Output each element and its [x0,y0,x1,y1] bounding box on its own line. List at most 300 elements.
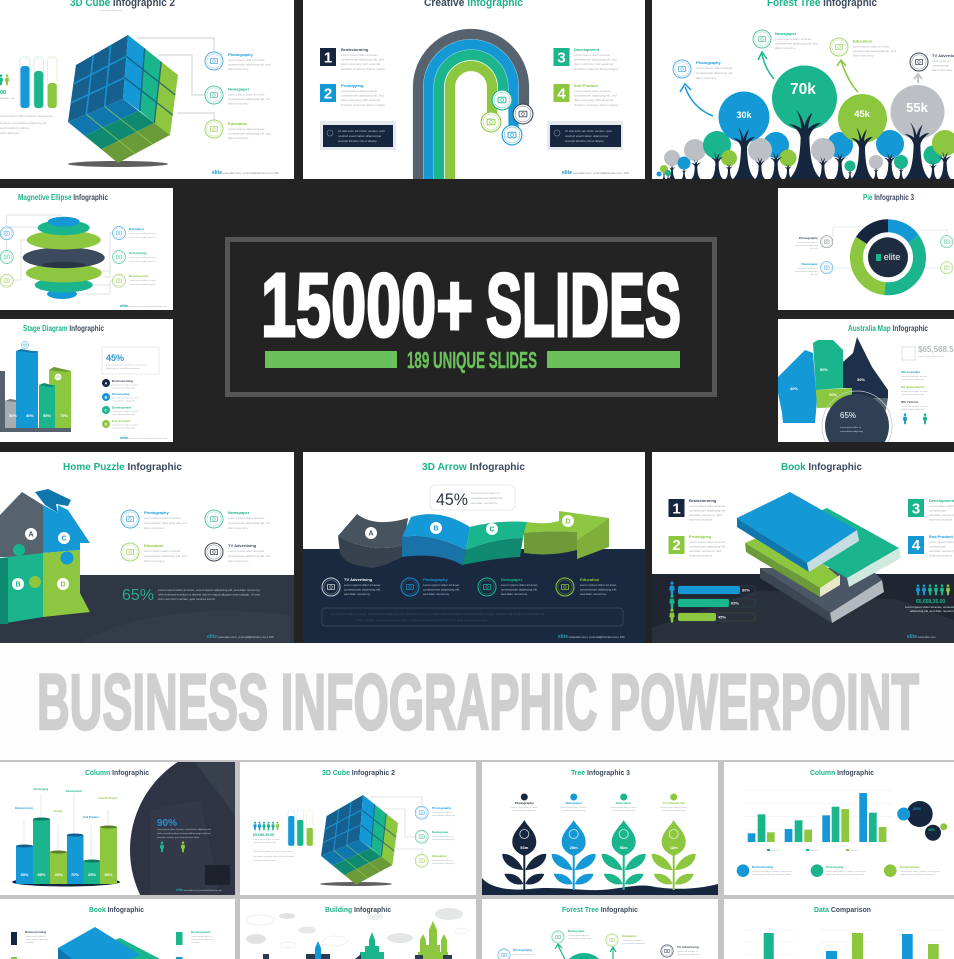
45% box: 45% [106,353,124,363]
region list: WA Australia [901,370,920,374]
circle stats [897,801,947,841]
cylinder chart: 80% [104,872,113,877]
bottom stat items [737,864,940,877]
callout: TV Advertising: diam nonummy [932,68,953,72]
callout: TV Advertising: TV Advertising [228,543,257,548]
map of Australia [778,337,892,442]
footer: elite www.elite.com | yourmail@domain.com | 106 [558,634,625,640]
people stat: Lorem ipsum dolor sit amet, consectetuer [253,850,293,853]
icons and labels [0,227,156,287]
column labels: Prototyping [34,787,49,791]
leaf plants: 18m [670,845,678,850]
heading: Home Puzzle: Home Puzzle Infographic [63,461,182,473]
people stat: sed tincidunt ut labore [0,126,30,130]
panel: bottom Data Comparison [724,899,954,959]
bars chart [288,810,313,846]
callout: Newspaper: Newspaper [228,86,250,92]
3D arrow ribbon: B [433,526,439,532]
callout: Photography [205,52,271,71]
panel: Australia Map slide [778,319,954,442]
45% box: adipiscing elit, sed diam nonummy [106,367,140,370]
callout: Education: Lorem ipsum dolor sit amet, [853,44,890,48]
note box [322,608,623,626]
callout: Newspaper: diam nonummy [228,526,249,530]
callouts [415,806,456,867]
note box left: suscipit lobortis nisl ut aliquip [338,139,377,143]
plant headers: Lorem ipsum dolor sit amet, [660,806,688,809]
callouts: Photography [432,806,451,810]
bottom stat items: Brainstorming [752,865,773,869]
pie labels and icons: Newspaper [801,262,819,266]
people stat: sit amet, consectetur adipiscing elit [0,121,47,125]
step 3: Development [929,498,954,503]
lettered list: consectetuer adipiscing [112,413,136,416]
panel: Forest Tree Infographic slide [652,0,954,179]
pie labels and icons: consectetuer adipiscing [795,270,819,273]
step 4: 4 [557,86,566,102]
stat: 90%: nibh euismod tincidunt ut laoreet dolore magna aliquam [157,832,211,835]
bottom stat items: adipiscing elit, sed diam nonummy nibh [752,873,791,876]
heading: Magnetive Ellipse: Magnetive Ellipse Infographic [18,193,108,202]
step 1: 1 [324,50,332,66]
step boxes: sed diam [191,942,200,944]
lettered list: Prototyping [112,392,129,396]
callouts: Lorem ipsum dolor sit [622,939,643,942]
puzzle house: C [61,536,67,542]
plant headers: Lorem ipsum dolor sit amet, [511,806,538,809]
plant headers: Lorem ipsum dolor sit amet, [560,806,588,809]
headline: 15000+ SLIDES: SLIDES [486,256,681,356]
step 4: 4 [912,537,921,554]
callout: Photography: Lorem ipsum dolor sit amet, [228,58,265,62]
callout: Education: consectetuer adipiscing elit, sed [144,554,187,558]
bottom stat items: Lorem ipsum dolor sit amet, consectetuer [900,870,940,873]
progress bars [669,581,755,622]
step 4 [908,534,954,558]
callouts [498,929,701,959]
step 4 [554,83,618,107]
step 1: consectetuer adipiscing elit, [689,508,726,512]
region list: consectetuer adipiscing [901,378,925,381]
callout: TV Advertising [910,53,954,72]
callout: Education: Lorem ipsum dolor sit amet, [144,549,181,553]
title frame [228,240,714,394]
callout: Photography: Lorem ipsum dolor sit amet, [696,66,733,70]
panel: bottom Forest Tree Infographic [482,899,718,959]
callout: Photography: Photography [696,60,721,65]
footer: elite www.elite.com | yourmail@domain.com | 105 [562,170,629,176]
stat: 65%: enim ad minim veniam, quis nostrud exerci [158,597,215,601]
icons and labels: Education [129,227,144,231]
step 2: Lorem ipsum dolor sit amet, [341,89,378,93]
step 1: Lorem ipsum dolor sit amet, [689,504,726,508]
puzzle house: A [28,532,34,538]
footer: elite www.elite.com | yourmail@domain.com [120,303,167,308]
headline: 15000+ SLIDES: 15000+ [261,256,473,356]
callout: Education: Education [853,38,873,44]
progress bars: 80% [742,588,750,592]
panel: Magnetive Ellipse slide [0,188,173,310]
callout: Newspaper [205,510,271,530]
note box left [320,121,396,150]
callout: Newspaper: diam nonummy [228,102,249,106]
people stat: 65,658,35.00 [916,599,945,605]
heading: Tree: Tree Infographic 3 [571,770,630,777]
panel: Stage Diagram slide [0,319,173,442]
callouts: consectetuer adipiscing [432,862,456,865]
region list: Lorem ipsum dolor sit amet [901,375,928,378]
callout: Photography: Photography [228,52,253,57]
callouts: consectetuer adipiscing [432,814,456,817]
footer: elite www.elite.com | yourmail@domain.com | 105 [207,634,274,640]
callout: Photography: diam nonummy [696,76,717,80]
icons and labels: Lorem ipsum dolor sit amet [129,232,156,235]
callout: Photography [121,510,187,530]
people stat: Lorem ipsum dolor sit amet consectetur [0,114,53,118]
callout: Newspaper: sed diam nonummy [501,592,528,596]
step 2: 2 [672,537,681,554]
plant headers: Education [616,801,631,805]
photo circle [130,762,235,895]
callout: Newspaper: Newspaper [775,31,797,36]
region list: consectetuer adipiscing [901,393,925,396]
puzzle house [0,489,90,624]
3D arrow ribbon: C [489,526,495,534]
callout: Newspaper: Lorem ipsum dolor sit amet, [228,516,265,520]
lettered list: Brainstorming [112,379,133,383]
step boxes: Brainstorming [25,930,46,934]
connector lines [833,227,947,268]
bottom stat items: Development [900,865,919,869]
budget figure: Lorem ipsum dolor sit amet [918,355,945,358]
panel: bottom Tree Infographic 3 [482,762,718,895]
leaf plants [502,820,696,890]
cylinder chart [12,795,120,886]
map region values: 50% [820,367,828,372]
step 1: sed diam nonummy nibh [689,513,722,517]
pie labels and icons: consectetuer adipiscing [795,244,819,247]
stage columns: 75% [60,413,68,418]
45% box: 45% [436,490,468,509]
bottom stat items: Lorem ipsum dolor sit amet, consectetuer [752,870,792,873]
stage columns [0,341,71,432]
column labels: Design [54,809,63,813]
step 2: sed diam nonummy nibh [689,549,722,553]
callout: Newspaper: consectetuer adipiscing elit, sed [228,521,271,525]
lettered list: consectetuer adipiscing [112,426,136,430]
chart legend: Region 2 [810,850,820,852]
callouts: Education [432,854,447,858]
callout: TV Advertising: diam nonummy [228,559,249,563]
step 2: Prototyping [341,83,364,88]
plant headers: Lorem ipsum dolor sit amet, [610,806,638,809]
callouts: consectetuer adipiscing [568,937,592,940]
callout: Newspaper: Lorem ipsum dolor sit amet, [501,583,538,587]
icons and labels: Lorem ipsum dolor sit amet [129,256,156,259]
people stat: consectetuer adipiscing [253,841,277,844]
step 2: tincidunt ut laoreet dolore magna [341,103,385,107]
donut chart [856,226,920,289]
grey bottom background [0,760,954,959]
plant headers: consectetuer adipiscing [513,809,537,812]
grid lines [743,791,892,842]
45% box: Lorem ipsum dolor sit [471,491,500,495]
people stat: people, per [0,96,15,100]
callout: TV Advertising: consectetuer adipiscing elit, sed [228,554,271,558]
light middle band [0,643,954,760]
column labels: Development [66,789,82,793]
heading: Column: Column Infographic [85,770,149,777]
puzzle house: D [60,582,66,588]
callouts: consectetuer adipiscing [432,838,456,841]
note box left: Ut wisi enim ad minim veniam, quis [338,129,385,133]
step 4: tincidunt ut laoreet dolore magna [574,103,618,107]
callout: Newspaper: diam nonummy [775,46,796,50]
cube illustration [68,35,178,167]
sub-banner: 189 unique slides [265,347,680,373]
step 3: 3 [912,500,920,518]
step 2 [668,534,726,558]
region list: Lorem ipsum dolor sit amet [901,405,928,408]
region list: Lorem ipsum dolor sit amet [901,390,928,393]
stacked ellipses [23,217,105,299]
connector lines [7,215,113,294]
callout: Education: diam nonummy [853,54,874,58]
step 1: consectetuer adipiscing elit, sed [341,58,384,62]
callout: Newspaper: Newspaper [501,577,523,582]
panel: 3D Cube Infographic 2 slide [0,0,294,179]
tree values: 45k [854,109,871,120]
bottom stat items: adipiscing elit, sed diam nonummy [900,873,934,876]
note box right: suscipit lobortis nisl ut aliquip [565,139,604,143]
lettered list: C [105,408,108,412]
region list [901,370,928,424]
note box right: nostrud exerci tation ullamcorper [565,134,609,138]
donut chart: elite [884,252,900,262]
people stat: 65,658,35.00 [253,833,274,837]
region list: SA Queensland [901,385,924,389]
callout: Newspaper: Newspaper [228,510,250,515]
stage columns: 30% [9,413,17,418]
callout: Newspaper: Lorem ipsum dolor sit amet, [228,92,265,96]
heading: 3D Cube: 3D Cube Infographic 2 [322,770,395,777]
callout: TV Advertising: TV Advertising [344,577,373,582]
tree trunks [662,110,951,179]
map region values: 30% [857,377,865,382]
people stat: ut laoreet dolore magna [253,859,277,862]
step 1 [668,498,726,522]
panel: bottom Column Infographic with photo [0,762,235,895]
heading: Building: Building Infographic [325,907,391,914]
step 2: diam nonummy nibh euismod [341,98,381,102]
callout: TV Advertising: Lorem ipsum [932,59,950,63]
step 2: 2 [324,86,332,102]
footer: elite www.elite.com | yourmail@domain.com [176,888,222,892]
map region values [790,367,865,397]
step 3 [554,47,618,71]
arrows [555,944,616,959]
step 4: End Product [929,534,953,539]
callout: Education: consectetuer adipiscing elit, sed [228,132,271,136]
heading: Book: Book Infographic [781,461,862,473]
map of Australia: 65% [840,411,856,420]
grid lines [742,930,945,954]
lettered list: Lorem ipsum dolor sit amet [112,410,139,413]
stat: 90% [157,818,211,852]
step 1: Brainstorming [341,47,369,52]
leaf plants: 56m [620,845,628,850]
callout: Education: sed diam nonummy [580,592,607,596]
callout: TV Advertising: Lorem ipsum dolor sit amet, [228,549,265,553]
ground wave [482,878,718,895]
callouts: Lorem ipsum dolor sit [513,953,534,956]
plant headers [511,794,688,812]
comparison bars [764,933,939,959]
tree values: 70k [790,81,816,98]
pie labels and icons [795,236,953,276]
45% box [102,347,159,374]
map region values: 20% [829,392,837,397]
books [58,927,160,959]
heading: Pie: Pie Infographic 3 [863,193,914,202]
icons and labels: consectetuer adipiscing elit [129,283,156,286]
heading: Column: Column Infographic [810,770,874,777]
callouts: Lorem ipsum dolor sit [432,859,453,862]
tree values [736,81,929,120]
lettered list: A [105,380,108,386]
callout: Education [830,38,896,58]
column labels: Brainstorming [15,806,33,810]
callouts: Lorem ipsum dolor sit [568,934,589,937]
lettered list: End Product [112,419,130,423]
stat: 65% [122,587,260,604]
panel: bottom 3D Cube Infographic 2 [240,762,476,895]
step 2: consectetuer adipiscing elit, [689,544,726,548]
callout: Newspaper: Lorem ipsum dolor sit amet, [775,37,812,41]
faint dark photo backdrop [80,611,290,642]
step 3: tincidunt ut laoreet dolore magna [574,67,618,71]
step 1: euismod tincidunt [689,518,713,522]
step boxes: consectetuer adipiscing [25,938,49,941]
stat: 90%: 90% [157,818,177,829]
stat: 65%: nibh euismod tincidunt ut laoreet dolore magna aliquam erat volutpat. Ut wisi [158,592,260,596]
step 1 [320,47,385,71]
footer: elite www.elite.com [907,634,936,640]
callout: TV Advertising [205,543,271,563]
icons and labels: Development [129,274,148,278]
circle stats: 25% [913,806,921,811]
panel: Home Puzzle slide [0,452,294,643]
callouts: consectetuer adipiscing [677,953,701,956]
footer: elite www.elite.com | yourmail@domain.com [120,435,167,440]
callout: TV Advertising [322,577,381,596]
panel: 3D Arrow slide [303,452,645,643]
callouts: consectetuer adipiscing [622,942,646,945]
chart legend [767,849,860,852]
stat: 65%: 65% [122,587,154,604]
heading: Data Comparison: Data Comparison [814,907,871,914]
plant headers: Photography [515,801,534,805]
panel: bottom Book Infographic [0,899,235,959]
step 4: consectetuer [929,544,946,548]
callout: Photography: consectetuer adipiscing elit, [423,588,460,592]
step 1: diam nonummy nibh euismod [341,62,381,66]
step 2: consectetuer adipiscing elit, sed [341,94,384,98]
leaf plants: 53m [520,845,529,850]
plant headers: Newspaper [565,801,583,805]
dark background [0,0,954,643]
step 3: 3 [557,50,566,66]
callout: Newspaper [478,577,538,596]
note box: Lorem ipsum dolor sit amet, consectetuer adipiscing elit, sed diam nonummy nibh euismod tincidunt ut laoreet dolore magna aliquam erat volutpat ut wisi enim ad [330,612,545,616]
step boxes [11,930,215,959]
callout: Education: consectetuer adipiscing elit, [580,588,617,592]
plant headers: consectetuer adipiscing [612,809,636,812]
callouts: Lorem ipsum dolor sit [432,835,453,838]
callout: Photography: Lorem ipsum dolor sit amet, [144,516,181,520]
sub-banner: 189 unique slides: 189 UNIQUE SLIDES [407,347,537,373]
stage columns: 55% [43,413,51,418]
callout: Photography: consectetuer adipiscing elit, sed [144,521,187,525]
panel: Book Infographic slide [652,452,954,643]
circle stats: 35% [928,828,936,832]
pie labels and icons: Lorem ipsum dolor sit [797,267,818,270]
step 1: tincidunt ut laoreet dolore magna [341,67,385,71]
note box left: nostrud exerci tation ullamcorper [338,134,382,138]
callout: Photography: consectetuer adipiscing elit, [696,71,733,75]
cylinder chart: 30% [20,872,29,877]
region list: WA Victoria [901,400,918,404]
step 3: euismod tincidunt [929,518,953,522]
3D arrow ribbon: D [565,518,571,526]
callout: TV Advertising: consectetuer [932,64,949,68]
plant headers: consectetuer adipiscing [662,809,686,812]
icons and labels: consectetuer adipiscing elit [129,236,156,239]
callout: TV Advertising: Lorem ipsum dolor sit amet, [344,583,381,587]
callout: Photography: Lorem ipsum dolor sit amet, [423,583,460,587]
step 4: End Product [574,83,598,88]
callout: Photography: diam nonummy [144,526,165,530]
stat: 90%: ad minim veniam, quis nostrud exerci tation [157,836,200,839]
budget figure [902,345,954,360]
panel: bottom Column Infographic chart [724,762,954,895]
plant headers: TV Advertising [663,801,685,805]
45% box: Lorem ipsum dolor sit amet, consectetuer [106,364,146,366]
tree values: 55k [906,100,929,115]
stat: 65%: Lorem ipsum dolor sit amet. Lorem ipsum adipiscing elit, sed diam nonummy [158,588,260,592]
step boxes: Lorem ipsum dolor sit [25,935,46,938]
pie labels and icons: elit, sed [810,247,819,250]
callouts: Education [622,934,637,938]
callout: Newspaper: consectetuer adipiscing elit, sed [775,42,818,46]
step 4: Lorem ipsum dolor sit amet, [574,89,611,93]
callout: Education: consectetuer adipiscing elit, sed [853,49,896,53]
cylinder chart: 85% [37,872,46,877]
callout: Newspaper [205,86,271,106]
step boxes: consectetuer adipiscing [191,938,215,941]
callout: Photography: Photography [423,577,448,582]
region list: consectetuer adipiscing [901,408,925,411]
callout: Photography: Photography [144,510,169,515]
45% box: sed diam nonummy [471,501,498,505]
heading: 3D Arrow: 3D Arrow Infographic [422,461,525,473]
heading: Australia Map: Australia Map Infographic [848,324,928,333]
icons and labels: Prototyping [129,251,146,255]
callout: Education: Education [228,121,248,126]
cylinder chart: 70% [71,872,79,877]
45% box [430,485,515,510]
lettered list: Lorem ipsum dolor sit amet [112,396,139,400]
